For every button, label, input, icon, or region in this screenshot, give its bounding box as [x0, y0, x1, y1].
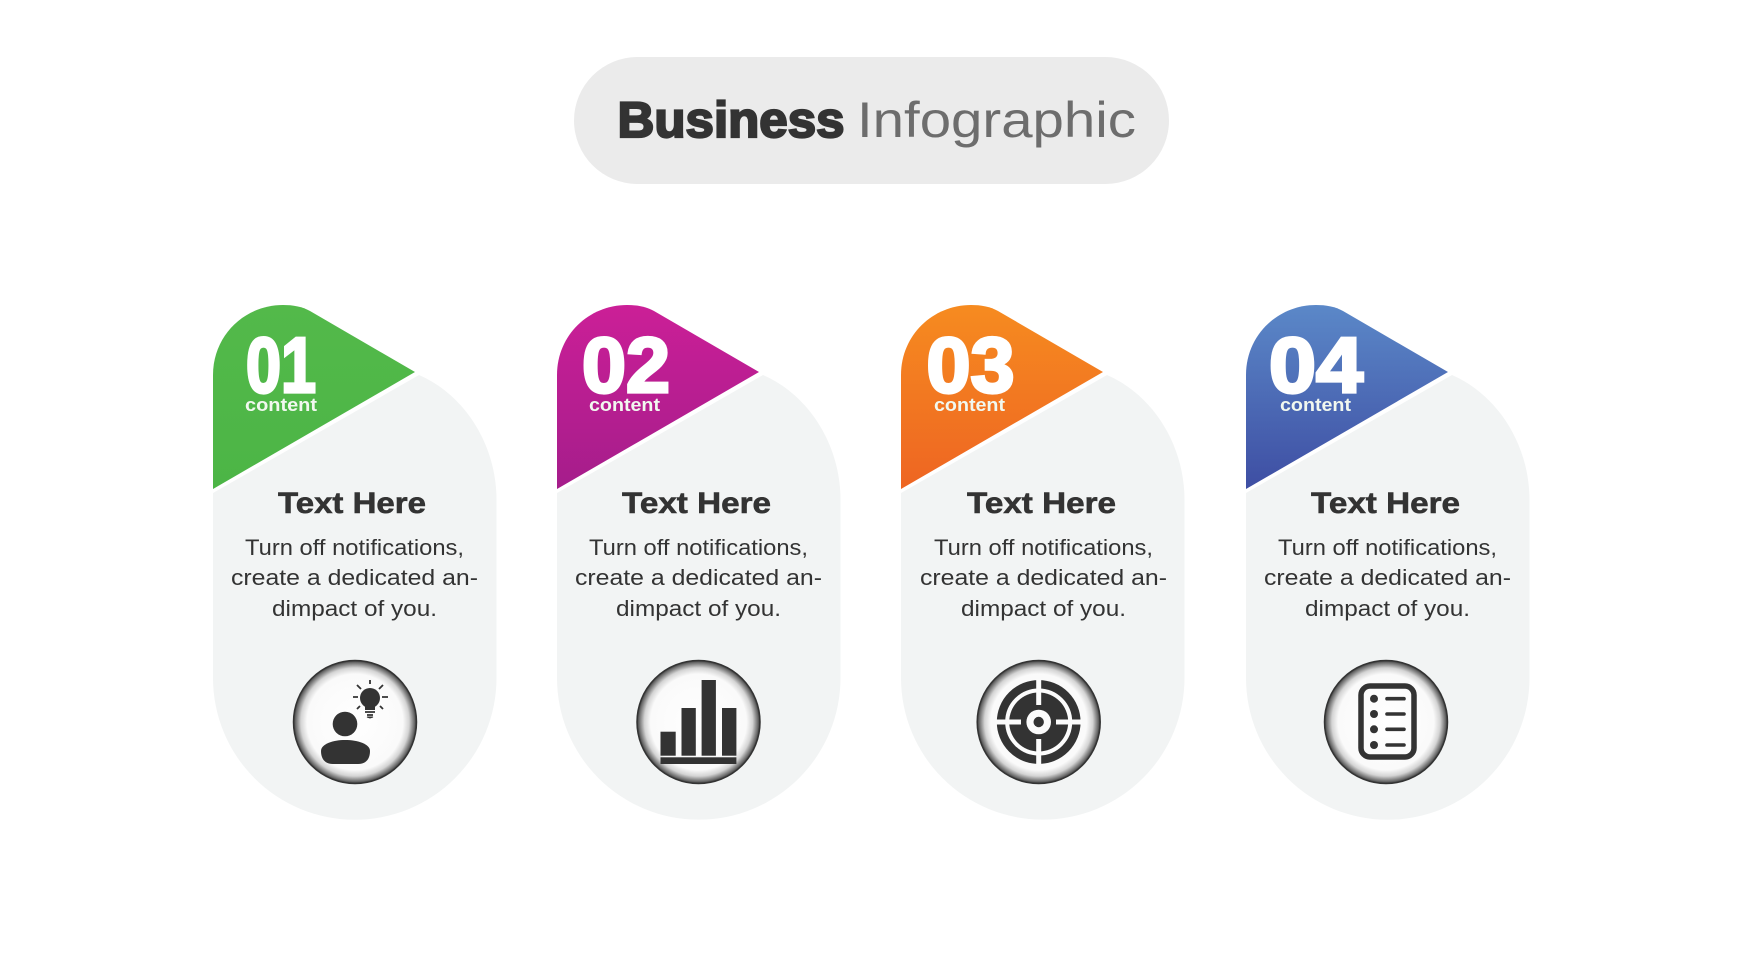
heading: Text Here [278, 487, 426, 520]
panel: card 04 [1246, 305, 1530, 820]
icon: checklist document [1324, 660, 1448, 784]
number 03: 03 [926, 321, 1014, 409]
number 02: 02 [582, 321, 670, 409]
body text: dimpact of you. [1305, 596, 1470, 621]
content label: content [589, 395, 660, 415]
icon: bar chart [637, 660, 760, 784]
panel: card 01 [213, 305, 496, 820]
content label: content [1280, 395, 1351, 415]
body text: Turn off notifications, [245, 535, 464, 560]
orange number tab [901, 305, 1103, 489]
magenta number tab [557, 305, 759, 489]
body text: dimpact of you. [961, 596, 1126, 621]
panel: card 03 [901, 305, 1184, 820]
card background [557, 375, 840, 820]
card background [213, 375, 496, 820]
heading: Text Here [967, 487, 1116, 520]
title text: Business [618, 92, 844, 148]
body text: create a dedicated an- [1264, 565, 1511, 590]
body text: Turn off notifications, [589, 535, 808, 560]
content label: content [245, 395, 317, 415]
body text: create a dedicated an- [231, 565, 478, 590]
content label: content [934, 395, 1005, 415]
body text: create a dedicated an- [920, 565, 1167, 590]
card background [901, 375, 1184, 820]
card background [1246, 375, 1530, 820]
icon: person with light bulb [294, 660, 416, 784]
icon: target [977, 660, 1100, 784]
number 04: 04 [1269, 321, 1363, 409]
body text: Turn off notifications, [1278, 535, 1497, 560]
heading: Text Here [622, 487, 771, 520]
body text: dimpact of you. [616, 596, 781, 621]
heading: Text Here [1311, 487, 1460, 520]
title text: Infographic [857, 92, 1136, 148]
body text: dimpact of you. [272, 596, 437, 621]
title pill [574, 57, 1169, 184]
body text: create a dedicated an- [575, 565, 822, 590]
panel: card 02 [557, 305, 840, 820]
number 01: 01 [246, 321, 316, 409]
blue number tab [1246, 305, 1448, 489]
body text: Turn off notifications, [934, 535, 1153, 560]
green number tab [213, 305, 415, 489]
